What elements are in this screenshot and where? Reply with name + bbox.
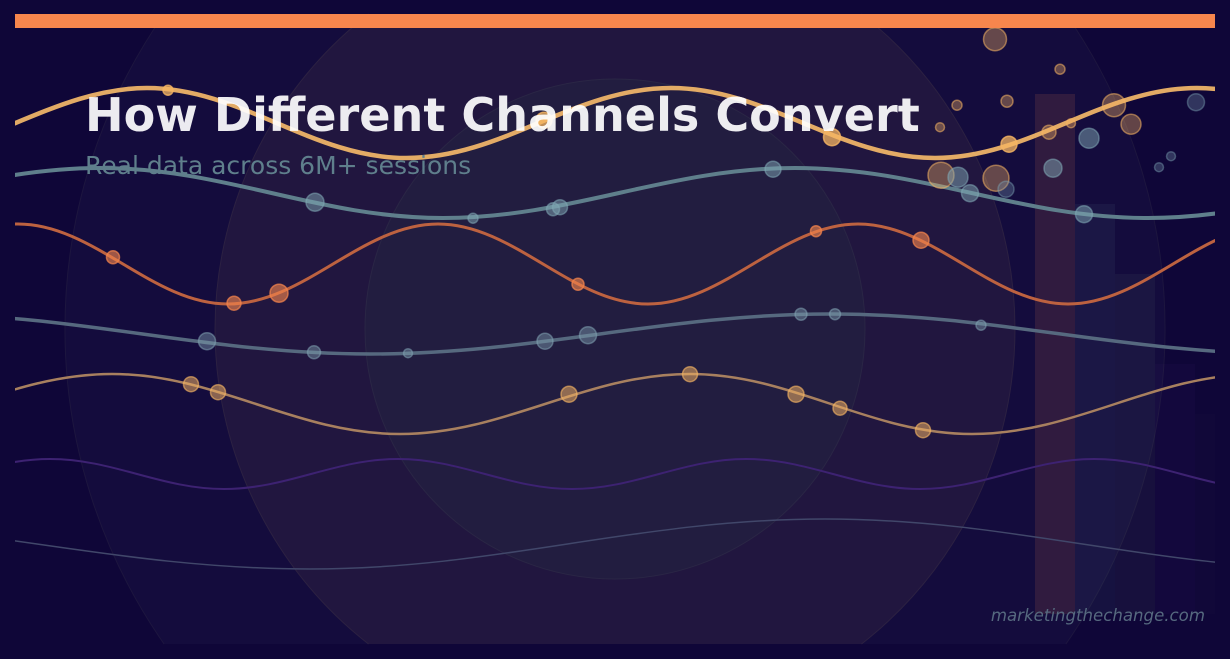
dots: tan series bbox=[184, 367, 930, 438]
top accent bar bbox=[15, 14, 1215, 28]
dots: tan cluster bbox=[928, 28, 1141, 191]
curve: orange channel bbox=[0, 224, 1230, 304]
curve: purple channel bbox=[0, 459, 1230, 489]
source watermark: marketingthechange.com bbox=[991, 606, 1205, 625]
curve: tan channel bbox=[0, 374, 1230, 434]
flow curves bbox=[0, 88, 1230, 569]
curve: teal channel bbox=[0, 168, 1230, 218]
curve: gray channel bbox=[0, 519, 1230, 569]
dots: orange series bbox=[106, 226, 929, 310]
dots: teal series bbox=[306, 128, 1099, 223]
dots: yellow series bbox=[163, 85, 1017, 152]
dots: faint blue cluster bbox=[998, 94, 1204, 197]
funnel bars at right bbox=[1035, 94, 1215, 614]
subtitle: Real data across 6M+ sessions bbox=[85, 151, 471, 180]
curve: yellow channel bbox=[0, 88, 1230, 158]
title: How Different Channels Convert bbox=[85, 88, 920, 142]
curve: slate channel bbox=[0, 314, 1230, 354]
dots: slate series bbox=[198, 308, 986, 359]
